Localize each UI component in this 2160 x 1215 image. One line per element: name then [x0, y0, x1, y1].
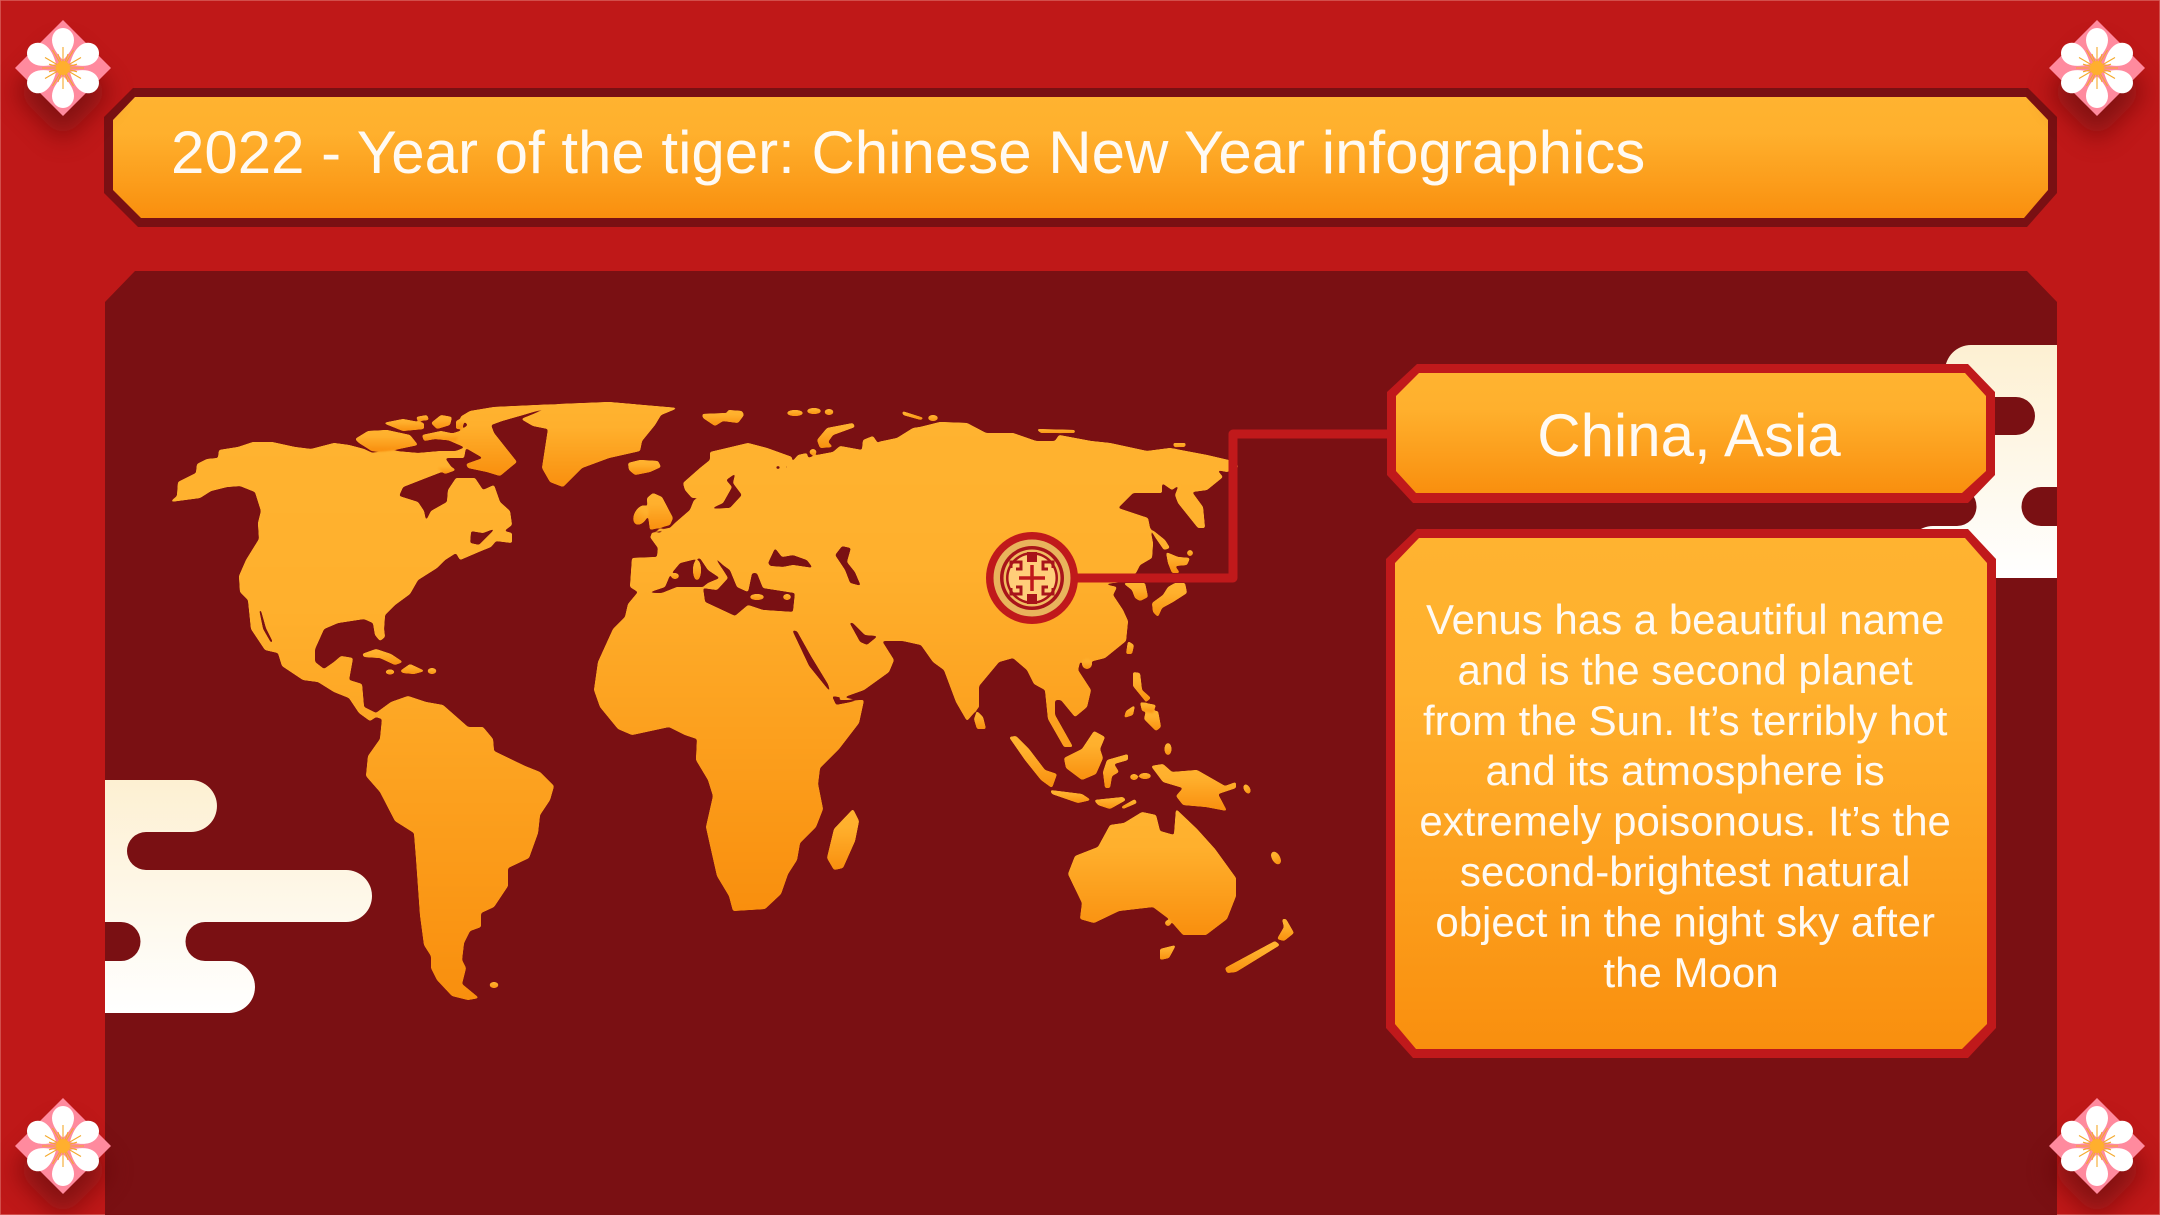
continent: Americas: [170, 442, 554, 1000]
continent: Eurasia and Africa: [594, 422, 1238, 911]
title text: 2022 - Year of the tiger: Chinese New Year infographics: [171, 119, 1645, 186]
description text: second-brightest natural: [1460, 848, 1910, 895]
islands: Canadian Arctic: [355, 404, 559, 476]
description text: and its atmosphere is: [1486, 747, 1885, 794]
cloud: top right: [1790, 345, 2057, 578]
location text: China, Asia: [1537, 402, 1841, 469]
icon: knot medallion: [986, 532, 1078, 624]
description text: from the Sun. It’s terribly hot: [1423, 697, 1948, 744]
flower: bottom right: [2049, 1098, 2145, 1215]
description text: Venus has a beautiful name: [1426, 596, 1944, 643]
flower: bottom left: [15, 1098, 111, 1215]
island: Greenland: [521, 402, 678, 487]
description text: the Moon: [1603, 949, 1779, 996]
description text: and is the second planet: [1457, 646, 1913, 693]
islands: Japan and East Asia: [974, 550, 1193, 729]
islands: Southeast Asia: [1009, 672, 1252, 811]
connector line: [1076, 434, 1387, 578]
panel: description: [1386, 529, 1996, 1058]
panel: location label: [1387, 364, 1995, 503]
flower: top right: [2049, 20, 2145, 140]
continent: Australia: [1068, 809, 1236, 935]
islands: Europe and Arctic: [628, 408, 1186, 600]
description text: extremely poisonous. It’s the: [1419, 798, 1951, 845]
islands: Oceania: [1160, 850, 1294, 973]
flower: top left: [15, 20, 111, 140]
description text: object in the night sky after: [1435, 898, 1935, 945]
world map: [170, 402, 1294, 1000]
panel: map backdrop: [105, 271, 2057, 1215]
title bar: [104, 88, 2057, 227]
islands: Caribbean and Falklands: [362, 649, 498, 988]
cloud: bottom left: [105, 780, 372, 1013]
island: Madagascar: [827, 809, 859, 870]
